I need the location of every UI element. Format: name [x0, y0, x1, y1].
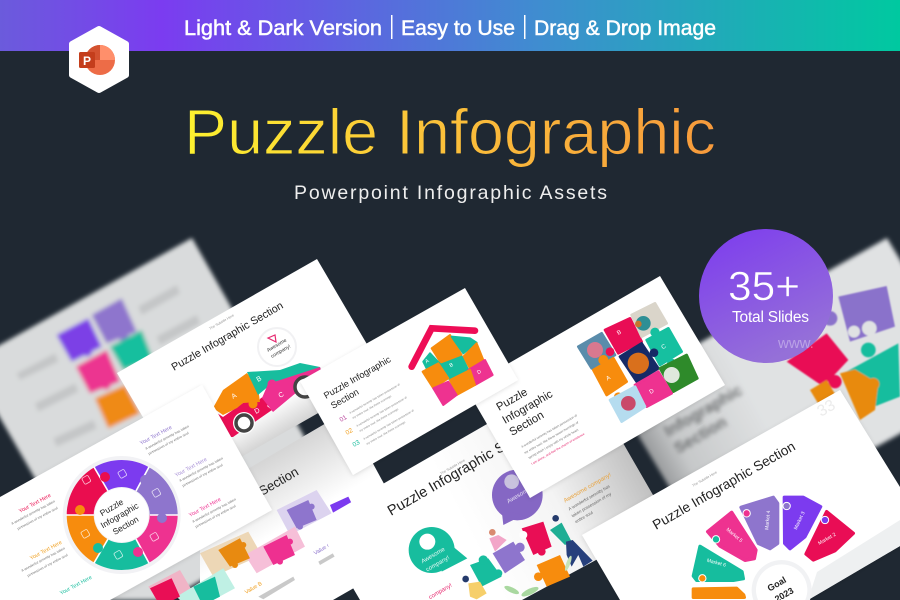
slide paragraph: my entire soul, like these sweet mornings of: [524, 420, 579, 455]
numbered list: [338, 382, 415, 449]
goal label: [766, 575, 795, 600]
slide heading: Section: [508, 409, 546, 439]
puzzle strip pieces: [148, 490, 355, 600]
slide: goal wheel: [582, 390, 900, 600]
house puzzle illustration: [412, 328, 493, 405]
blurred slide: right: [612, 238, 900, 543]
callout labels around the circle: Your Text Here: [29, 540, 63, 562]
icon: PowerPoint hexagon: [72, 29, 126, 90]
slide title: Puzzle Infographic Section: [650, 439, 798, 533]
callout descriptions: possession of my entire soul: [182, 463, 224, 488]
numbered list: A wonderful serenity has taken possession of: [356, 395, 408, 428]
callout descriptions: possession of my entire soul: [148, 431, 190, 456]
slide: circular puzzle: [0, 385, 272, 600]
badge: 35+ total slides: 35+: [728, 263, 800, 309]
image puzzle grid: [578, 303, 697, 422]
blurred slide heading: Infographic: [662, 382, 746, 440]
slide: teamwork puzzle: [315, 370, 668, 600]
car puzzle illustration: A: [230, 392, 238, 401]
goal label: Goal: [766, 575, 788, 593]
callout descriptions: [11, 424, 237, 578]
slide heading: Puzzle Infographic: [322, 354, 393, 401]
badge: 35+ total slides: [699, 229, 833, 363]
centre label: Infographic: [99, 500, 141, 530]
text: awesome company orange: [563, 472, 613, 524]
slide: image puzzle: [466, 276, 725, 498]
text: awesome company orange: entire soul: [574, 510, 594, 524]
person left: [489, 529, 507, 552]
numbered list: 03: [352, 439, 362, 449]
puzzle pieces held by people: [470, 522, 570, 587]
text: awesome company orange: Awesome company!: [563, 472, 613, 504]
car puzzle illustration: B: [256, 375, 263, 384]
car puzzle illustration: D: [254, 407, 261, 416]
slide heading: Puzzle: [494, 386, 530, 414]
callout descriptions: A wonderful serenity has taken: [145, 424, 190, 451]
slide subtitle: The Subtitle Here: [692, 470, 718, 488]
subtitle: Powerpoint Infographic Assets: [294, 182, 607, 204]
blurred slide: left: [0, 238, 340, 600]
callout labels around the circle: Your Text Here: [18, 493, 52, 515]
callout descriptions: A wonderful serenity has taken: [179, 456, 224, 483]
image puzzle grid: C: [661, 343, 668, 351]
person bottom: [462, 576, 487, 599]
badge: 35+ total slides: Total Slides: [732, 309, 809, 326]
numbered list: my entire soul, like these mornings: [366, 420, 407, 446]
speech bubble: teal: company!: [425, 555, 451, 573]
blurred slide heading second line: Section: [672, 414, 730, 457]
slide title fragment: Section: [256, 464, 301, 499]
badge: 35+ total slides: www.: [777, 335, 814, 352]
slide subtitle: The Subtitle Here: [440, 458, 466, 476]
slide: house puzzle: [300, 288, 518, 475]
speech bubble: purple: Awesome: [506, 486, 533, 505]
circular puzzle diagram: [63, 456, 181, 574]
header text: Light & Dark Version: [184, 17, 382, 40]
image puzzle grid: B: [616, 330, 623, 337]
car puzzle illustration: C: [278, 391, 285, 400]
slide: car puzzle: [117, 259, 385, 489]
callout descriptions: A wonderful serenity has taken: [11, 499, 56, 526]
callout descriptions: possession of my entire soul: [195, 504, 237, 529]
value label: value B: Value B: [244, 581, 264, 596]
numbered list: 01: [338, 414, 349, 424]
callout: awesome company: Awesome: [266, 337, 288, 354]
callout descriptions: possession of my entire soul: [27, 553, 69, 578]
house puzzle illustration: D: [476, 369, 483, 376]
callout labels around the circle: Your Text Here: [139, 425, 173, 447]
callout labels around the circle: [18, 425, 222, 597]
callout: awesome company: [258, 328, 296, 366]
house puzzle illustration: A: [424, 358, 431, 365]
goal wheel chart: Market 3: [793, 511, 807, 531]
goal wheel chart: Market 4: [764, 510, 772, 530]
slide heading: [494, 386, 555, 439]
teamwork illustration: [409, 470, 613, 600]
header text: [184, 15, 716, 40]
numbered list: A wonderful serenity has taken possession of: [348, 382, 401, 415]
numbered list: my entire soul, like these mornings: [352, 394, 393, 420]
callout labels around the circle: Your Text Here: [188, 497, 222, 519]
value label: value C: Value C: [313, 542, 333, 557]
centre label: Section: [111, 514, 141, 537]
slide heading second line: Section: [329, 387, 361, 411]
slide paragraph: [520, 413, 585, 466]
image puzzle grid: D: [649, 388, 656, 396]
numbered list: my entire soul, like these mornings: [358, 407, 400, 433]
slide heading: Infographic: [500, 388, 555, 427]
callout descriptions: possession of my entire soul: [17, 506, 59, 531]
person right: [550, 515, 593, 567]
slide paragraph: spring which I enjoy with my whole heart.: [528, 427, 580, 460]
slide paragraph: A wonderful serenity has taken possession of: [520, 413, 578, 449]
plants: [503, 555, 573, 598]
goal wheel chart: Market 6: [706, 558, 727, 569]
goal wheel chart: Market 2: [817, 532, 837, 547]
numbered list: A wonderful serenity has taken possession of: [362, 408, 415, 441]
callout descriptions: A wonderful serenity has taken: [21, 546, 66, 573]
header text: Easy to Use: [401, 17, 515, 40]
callout labels around the circle: Your Text Here: [59, 575, 93, 597]
image puzzle grid: A: [605, 375, 612, 382]
text: awesome company orange: A wonderful serenity has: [567, 484, 611, 512]
header gradient bar: [0, 0, 900, 51]
car puzzle illustration: [213, 363, 322, 437]
house puzzle illustration: B: [449, 362, 455, 369]
slide: section puzzle strip: [148, 412, 420, 600]
pale lower band: [808, 520, 900, 600]
centre label: Puzzle: [98, 497, 125, 518]
slide title: Puzzle Infographic Section: [170, 300, 285, 374]
speech bubble: purple: [492, 470, 543, 525]
text: awesome company orange: taken possession of my: [571, 491, 613, 518]
header text: Drag & Drop Image: [534, 17, 716, 40]
page number: 33: [814, 397, 839, 420]
slide title: Puzzle Infographic Section: [385, 420, 542, 519]
icon: PowerPoint hexagon: P: [83, 54, 91, 68]
speech bubble: teal: Awesome: [421, 546, 447, 565]
slide paragraph: I am alone, and feel the charm of existence: [530, 432, 585, 466]
slide subtitle: The Subtitle Here: [208, 313, 235, 331]
callout descriptions: A wonderful serenity has taken: [192, 497, 237, 524]
title: Puzzle Infographic: [184, 96, 716, 168]
callout labels around the circle: Your Text Here: [174, 457, 208, 479]
goal wheel chart: [693, 497, 853, 600]
speech bubble: teal: [409, 527, 467, 573]
goal wheel chart: Market 5: [725, 527, 744, 544]
callout: awesome company: company!: [270, 344, 292, 360]
numbered list: 02: [344, 427, 355, 437]
